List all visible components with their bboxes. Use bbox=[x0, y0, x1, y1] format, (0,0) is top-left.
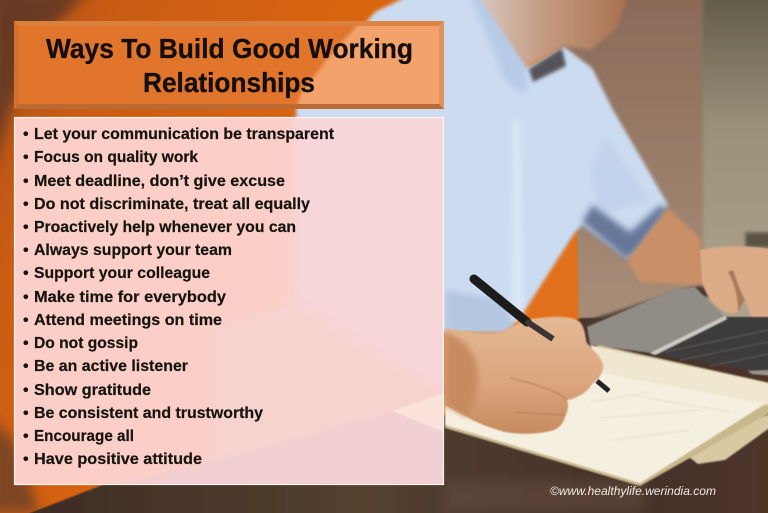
bullet list text: • bbox=[23, 312, 29, 329]
bullet list text: • bbox=[23, 428, 29, 445]
bullet list text: Attend meetings on time bbox=[34, 312, 222, 329]
bullet list text: Support your colleague bbox=[34, 265, 210, 282]
bullet list text: Show gratitude bbox=[34, 382, 151, 399]
photo: laptop bbox=[587, 287, 768, 376]
bullet list text: Do not gossip bbox=[34, 335, 138, 352]
bullet list text: • bbox=[23, 265, 29, 282]
bullet list text: • bbox=[23, 451, 29, 468]
icon: pen bbox=[474, 279, 609, 391]
bullet list text: Focus on quality work bbox=[34, 149, 198, 166]
bullet list text: Encourage all bbox=[34, 428, 134, 445]
bullet list text: • bbox=[23, 358, 29, 375]
bullet list text: Proactively help whenever you can bbox=[34, 219, 296, 236]
bullet list text: Always support your team bbox=[34, 242, 232, 259]
bullet list text: • bbox=[23, 126, 29, 143]
title text: Relationships bbox=[143, 67, 315, 98]
panel: list of ways bbox=[14, 100, 460, 490]
bullet list text: • bbox=[23, 149, 29, 166]
photo: notebook bbox=[445, 345, 768, 486]
bullet list text: Let your communication be transparent bbox=[34, 126, 335, 143]
title text: Ways To Build Good Working bbox=[46, 33, 413, 64]
bullet list text: • bbox=[23, 289, 29, 306]
bullet list text: • bbox=[23, 335, 29, 352]
bullet list text: Have positive attitude bbox=[34, 451, 202, 468]
title text bbox=[46, 33, 413, 98]
bullet list text: Be consistent and trustworthy bbox=[34, 405, 263, 422]
bullet list text: Be an active listener bbox=[34, 358, 188, 375]
photo: orange chair wedge bbox=[516, 228, 579, 322]
bullet list text: • bbox=[23, 173, 29, 190]
copyright credit: ©www.healthylife.werindia.com bbox=[550, 486, 716, 498]
photo: face and collar bbox=[477, 0, 628, 82]
photo: forearm and typing hand bbox=[627, 208, 768, 326]
bullet list text bbox=[23, 126, 335, 468]
bullet list text: • bbox=[23, 405, 29, 422]
bullet list text: • bbox=[23, 196, 29, 213]
bullet list text: Make time for everybody bbox=[34, 289, 226, 306]
bullet list text: • bbox=[23, 242, 29, 259]
photo: table bbox=[30, 285, 768, 513]
bullet list text: Meet deadline, don’t give excuse bbox=[34, 173, 285, 190]
bullet list text: • bbox=[23, 382, 29, 399]
photo: writing hand bbox=[445, 317, 603, 434]
title banner bbox=[14, 21, 444, 109]
photo: shirt bbox=[296, 0, 668, 340]
photo: wall and column bbox=[560, 0, 768, 325]
bullet list text: Do not discriminate, treat all equally bbox=[34, 196, 310, 213]
bullet list text: • bbox=[23, 219, 29, 236]
